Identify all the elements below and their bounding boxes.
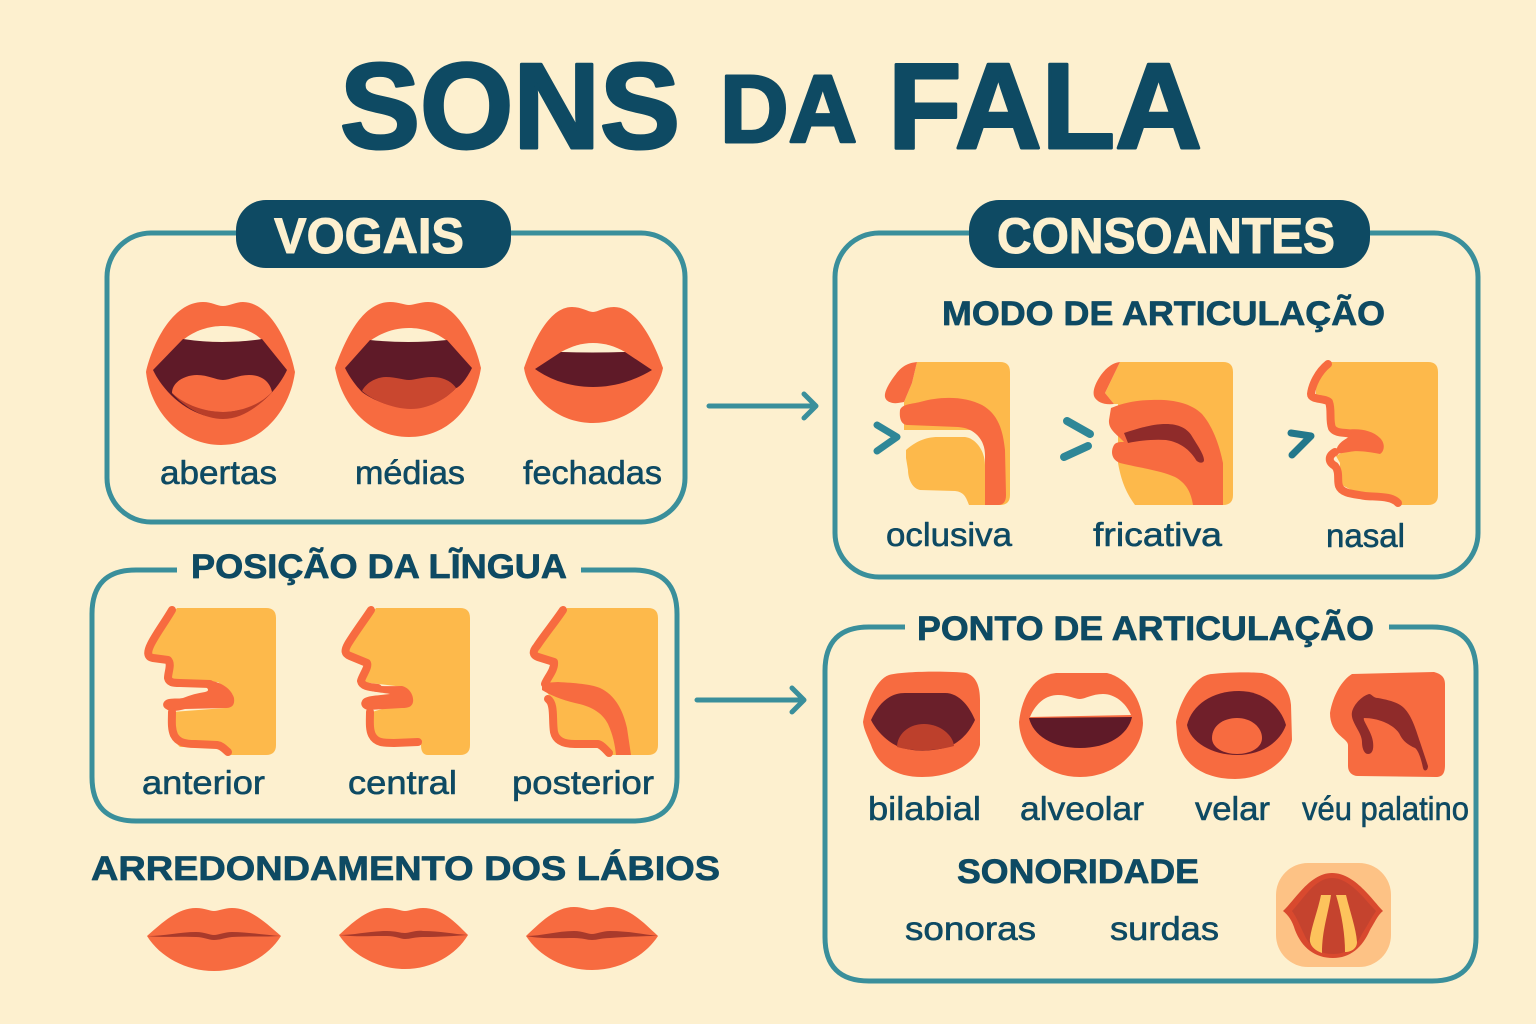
label: médias: médias bbox=[355, 454, 465, 491]
panel: posição da língua bbox=[92, 548, 677, 821]
heading: posição da língua: POSIÇÃO DA LĨNGUA bbox=[191, 548, 567, 586]
title: SONS bbox=[340, 38, 680, 174]
icon: mouth, alveolar bbox=[1019, 673, 1143, 777]
label: fechadas: fechadas bbox=[523, 454, 662, 491]
icon: lips 2 bbox=[339, 908, 468, 969]
icon: profile, oclusiva bbox=[877, 362, 1010, 505]
heading pill: vogais bbox=[236, 200, 511, 268]
heading: modo de articulação: MODO DE ARTICULAÇÃO bbox=[942, 295, 1385, 333]
label: posterior: posterior bbox=[512, 764, 654, 801]
label: surdas: surdas bbox=[1110, 910, 1219, 947]
heading: sonoridade: SONORIDADE bbox=[957, 853, 1199, 891]
icon: lips 1 bbox=[147, 908, 281, 971]
label: fricativa: fricativa bbox=[1093, 516, 1223, 553]
label: central: central bbox=[348, 764, 457, 801]
heading pill: vogais: VOGAIS bbox=[274, 208, 464, 264]
icon: profile, posterior bbox=[534, 608, 658, 755]
section: arredondamento dos lábios bbox=[91, 850, 720, 971]
icon: profile, nasal bbox=[1291, 362, 1438, 505]
panel: consoantes, modo de articulação bbox=[835, 200, 1478, 577]
icon: airflow strokes bbox=[1064, 421, 1090, 457]
icon: profile, anterior bbox=[148, 608, 276, 755]
arrow: língua to ponto bbox=[697, 688, 804, 712]
heading pill: consoantes: CONSOANTES bbox=[997, 208, 1335, 264]
icon: lips 3 bbox=[526, 907, 658, 970]
icon: vocal folds bbox=[1276, 863, 1391, 967]
icon: mid-open mouth, médias bbox=[335, 302, 481, 437]
title bbox=[340, 38, 1202, 174]
label: véu palatino: véu palatino bbox=[1302, 790, 1469, 827]
heading: arredondamento dos lábios: ARREDONDAMENTO DOS LÁBIOS bbox=[91, 850, 720, 888]
arrow: vogais to consoantes bbox=[709, 394, 816, 418]
heading: ponto de articulação: PONTO DE ARTICULAÇÃO bbox=[917, 610, 1374, 648]
label: bilabial: bilabial bbox=[868, 790, 981, 827]
icon: airflow chevron bbox=[877, 425, 897, 451]
icon: velum panel, véu palatino bbox=[1330, 672, 1445, 777]
label: abertas: abertas bbox=[160, 454, 277, 491]
icon: mouth, velar bbox=[1176, 672, 1292, 779]
icon: open mouth, abertas bbox=[146, 302, 295, 445]
icon: profile, central bbox=[346, 608, 470, 755]
label: velar: velar bbox=[1195, 790, 1270, 827]
title: FALA bbox=[888, 38, 1202, 174]
icon: nearly closed mouth, fechadas bbox=[524, 307, 663, 423]
icon: mouth, bilabial bbox=[863, 672, 980, 777]
label: anterior: anterior bbox=[142, 764, 265, 801]
title: DA bbox=[720, 56, 857, 163]
label: oclusiva: oclusiva bbox=[886, 516, 1013, 553]
label: sonoras: sonoras bbox=[905, 910, 1036, 947]
label: nasal: nasal bbox=[1326, 517, 1405, 554]
panel: ponto de articulação bbox=[825, 610, 1476, 981]
icon: profile, fricativa bbox=[1064, 362, 1233, 505]
label: alveolar: alveolar bbox=[1020, 790, 1144, 827]
icon: airflow chevron bbox=[1291, 433, 1311, 455]
panel: vogais bbox=[107, 200, 685, 522]
